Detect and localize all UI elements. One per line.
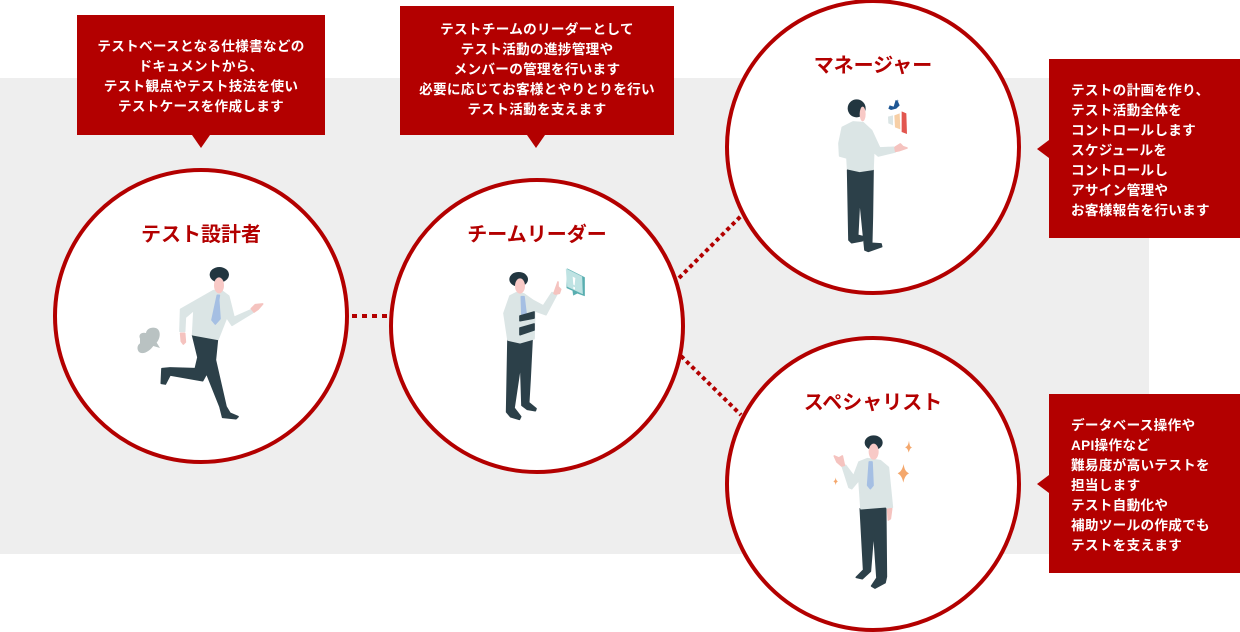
callout body: specialist: テストを支えます [1071, 538, 1182, 553]
callout body: manager: テスト活動全体を [1071, 103, 1182, 118]
heading: test designer: テスト設計者 [141, 223, 261, 246]
heading: team leader: チームリーダー [467, 222, 607, 246]
callout: specialist [1037, 394, 1240, 573]
callout body: manager: お客様報告を行います [1071, 203, 1210, 218]
callout body: specialist: 補助ツールの作成でも [1071, 518, 1210, 533]
connector: leader to specialist [681, 356, 741, 415]
circle: manager [727, 1, 1019, 293]
figure: running man [137, 267, 263, 419]
callout: manager [1037, 59, 1240, 238]
background band [0, 78, 1149, 554]
callout body: specialist: データベース操作や [1071, 418, 1195, 433]
callout body: test designer: テストベースとなる仕様書などの [97, 39, 305, 54]
callout body: team leader: 必要に応じてお客様とやりとりを行い [419, 82, 655, 97]
circle: team leader [391, 180, 683, 472]
callout body: manager: テストの計画を作り、 [1071, 83, 1209, 98]
callout body: test designer: テスト観点やテスト技法を使い [104, 79, 298, 94]
callout pointer: test designer [192, 135, 210, 148]
callout body: team leader: テストチームのリーダーとして [440, 22, 634, 37]
callout body: manager: コントロールし [1071, 163, 1168, 178]
circle: specialist [727, 338, 1019, 630]
callout body: specialist: 難易度が高いテストを [1071, 458, 1210, 473]
figure: manager seen from behind [839, 99, 907, 251]
callout body: test designer [77, 15, 325, 135]
callout body: team leader: テスト活動を支えます [468, 102, 606, 117]
circle: test designer [55, 170, 347, 462]
callout body: test designer: テストケースを作成します [118, 99, 284, 114]
callout body: specialist: テスト自動化や [1071, 498, 1168, 513]
callout body: specialist: API操作など [1071, 438, 1150, 453]
callout body: manager: アサイン管理や [1071, 183, 1168, 198]
heading: specialist: スペシャリスト [804, 392, 942, 414]
callout body: team leader: メンバーの管理を行います [454, 62, 620, 77]
callout body: manager: コントロールします [1071, 123, 1196, 138]
callout: team leader [400, 6, 674, 148]
callout body: specialist: 担当します [1071, 478, 1140, 493]
callout body: test designer: ドキュメントから、 [138, 59, 264, 74]
connector: designer to leader [352, 314, 388, 318]
connector: leader to manager [679, 216, 741, 278]
callout body: team leader: テスト活動の進捗管理や [461, 42, 613, 57]
callout pointer: team leader [527, 135, 545, 148]
figure: team leader pointing [504, 269, 585, 419]
callout pointer: manager [1037, 140, 1049, 158]
figure: specialist presenting [833, 435, 912, 588]
callout body: manager: スケジュールを [1071, 143, 1167, 158]
callout body: team leader [400, 6, 674, 135]
callout body: specialist [1049, 394, 1240, 573]
callout body: manager [1049, 59, 1240, 238]
callout pointer: specialist [1037, 475, 1049, 493]
heading: manager: マネージャー [814, 54, 932, 77]
callout: test designer [77, 15, 325, 148]
